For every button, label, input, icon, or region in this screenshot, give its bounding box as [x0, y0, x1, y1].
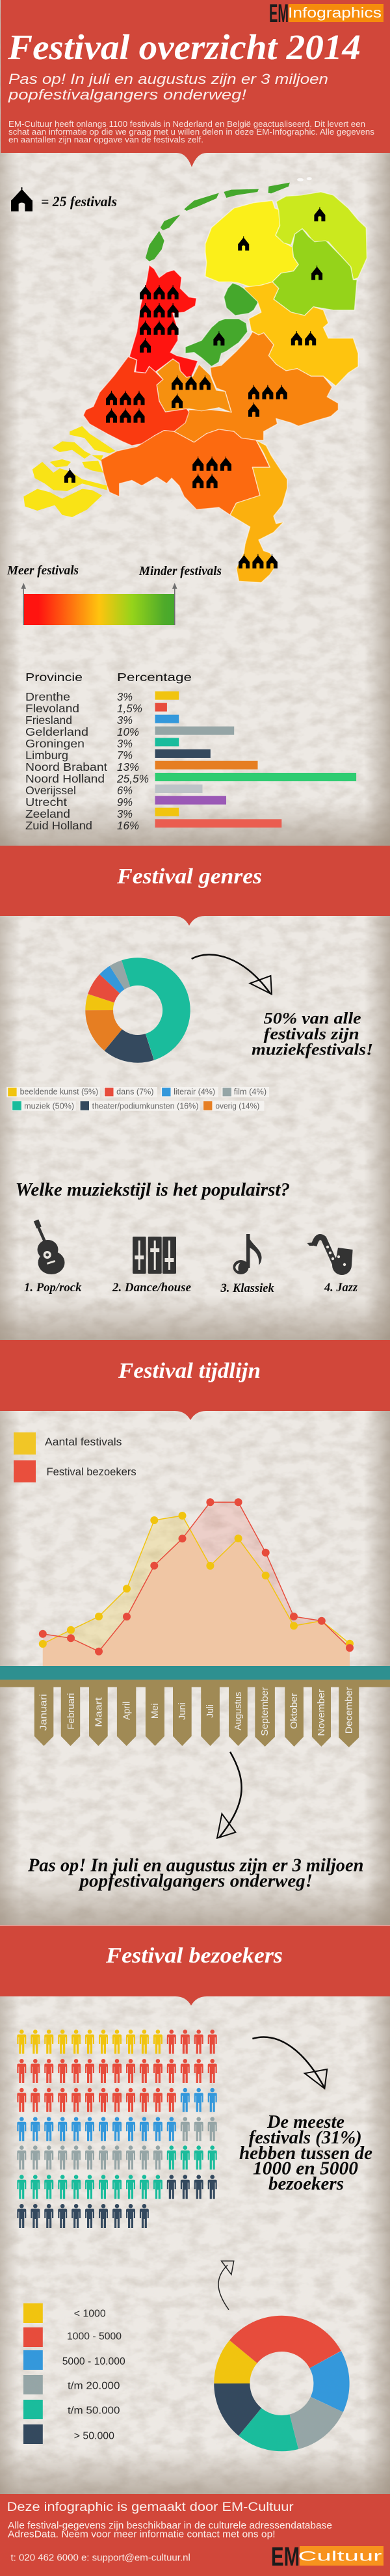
month labels: Juni	[177, 1702, 188, 1720]
area: festivals	[43, 1516, 350, 1666]
EM Infographics logo: EM	[269, 0, 289, 28]
percentages: 10%	[117, 725, 139, 738]
Flevoland	[185, 283, 259, 366]
month tabs	[34, 1687, 359, 1747]
subtitle	[8, 71, 328, 103]
subtitle: Pas op! In juli en augustus zijn er 3 miljoen	[8, 71, 328, 87]
month labels: Oktober	[289, 1693, 300, 1729]
province names: Flevoland	[25, 702, 79, 715]
visitor legend: 5000 - 10.000	[62, 2356, 125, 2367]
month labels: Juli	[205, 1704, 216, 1718]
province names: Utrecht	[25, 796, 67, 809]
label: klassiek: 3. Klassiek	[220, 1281, 274, 1295]
area overlap	[43, 1531, 350, 1666]
genre legend: beeldende kunst (5%)	[20, 1087, 98, 1097]
percentages: 9%	[117, 796, 133, 809]
province names: Gelderland	[25, 725, 88, 738]
month labels	[38, 1687, 355, 1736]
month labels: November	[316, 1689, 327, 1736]
colour scale legend: Minder festivals	[138, 564, 222, 578]
label: pop/rock: 1. Pop/rock	[24, 1281, 82, 1295]
tent legend: = 25 festivals	[41, 193, 117, 209]
colour scale legend: Meer festivals	[6, 563, 79, 578]
visitor legend: t/m 20.000	[68, 2381, 120, 2392]
intro text	[8, 120, 374, 144]
percentages: 3%	[117, 737, 133, 750]
row 2	[17, 2059, 217, 2083]
Noord Holland	[129, 265, 198, 377]
bar chart	[155, 691, 356, 827]
genre legend	[6, 1087, 269, 1111]
percentages: 16%	[117, 819, 139, 832]
callout: 50% music festivals	[252, 1010, 373, 1059]
row 6	[17, 2175, 217, 2199]
banner: Festival tijdlijn	[0, 1340, 390, 1420]
arrow down to callout	[217, 1752, 242, 1838]
intro text: en aantallen zijn naar opgave van de festivals zelf.	[8, 135, 203, 144]
area: visitors	[43, 1502, 350, 1666]
callout: 50% music festivals: muziekfestivals!	[252, 1041, 373, 1059]
visitor legend	[23, 2303, 125, 2444]
EM Cultuur logo	[271, 2542, 384, 2571]
callout: 3 million visitors: popfestivalgangers onderweg!	[78, 1872, 313, 1892]
table heading: Provincie	[25, 671, 83, 684]
banner: Festival bezoekers	[0, 1925, 390, 2006]
Zuid Holland	[83, 356, 189, 446]
Limburg	[230, 440, 287, 583]
map of the Netherlands	[23, 177, 367, 583]
province names: Friesland	[25, 714, 72, 727]
Noord Brabant	[101, 429, 270, 515]
EM Infographics logo	[269, 0, 384, 28]
banner: Festival genres: Festival genres	[116, 865, 262, 889]
Zeeland	[23, 426, 116, 517]
callout: most festivals: 1000 en 5000	[253, 2159, 358, 2179]
callout: 3 million visitors	[27, 1856, 364, 1892]
Wadden islands	[146, 183, 290, 262]
label: dance/house: 2. Dance/house	[112, 1281, 192, 1295]
tent legend	[11, 187, 117, 211]
subtitle: popfestivalgangers onderweg!	[8, 87, 246, 103]
percentages: 25,5%	[116, 772, 149, 785]
arrow up to pictogram	[218, 2261, 234, 2310]
Overijssel	[244, 282, 358, 386]
donut chart: genres	[83, 956, 192, 1065]
timeline legend	[14, 1432, 136, 1483]
timeline axis	[0, 1666, 390, 1747]
EM Cultuur logo: Cultuur	[298, 2549, 382, 2564]
genre legend: film (4%)	[234, 1087, 266, 1097]
province names	[25, 690, 107, 832]
intro text: EM-Cultuur heeft onlangs 1100 festivals in Nederland en België geactualiseerd. Dit levert een	[8, 120, 365, 129]
arrow to visitors callout	[252, 2037, 327, 2089]
banner: Festival genres	[0, 846, 390, 926]
donut chart: visitors	[212, 2313, 352, 2454]
province names: Zeeland	[25, 807, 70, 820]
visitor legend: t/m 50.000	[68, 2406, 120, 2417]
province names: Noord Holland	[25, 772, 105, 785]
row 1	[17, 2030, 217, 2054]
month labels: September	[259, 1687, 270, 1736]
visitor legend: < 1000	[74, 2309, 106, 2320]
heading: most popular music style: Welke muziekstijl is het populairst?	[16, 1179, 290, 1200]
callout: most festivals: hebben tussen de	[239, 2143, 372, 2164]
dots: visitors	[39, 1498, 354, 1656]
row 3	[17, 2088, 217, 2112]
month labels: December	[343, 1687, 355, 1734]
intro text: schat aan informatie op die we graag met u willen delen in deze EM-Infographic. Alle gegevens	[8, 127, 374, 137]
province names: Groningen	[25, 737, 84, 750]
label: jazz: 4. Jazz	[324, 1281, 358, 1295]
province names: Limburg	[25, 749, 68, 762]
percentages: 3%	[117, 714, 133, 727]
row 4	[17, 2117, 217, 2141]
title: Festival overzicht 2014	[7, 27, 361, 67]
row 5	[17, 2145, 217, 2169]
callout: 50% music festivals: 50% van alle	[264, 1010, 361, 1027]
province names: Zuid Holland	[25, 819, 92, 832]
visitor legend: > 50.000	[74, 2430, 114, 2441]
percentages: 3%	[117, 807, 133, 820]
icon: guitar	[36, 1220, 65, 1274]
icon: saxophone	[307, 1237, 353, 1275]
month labels: Maart	[94, 1697, 104, 1727]
callout: most festivals: bezoekers	[268, 2174, 344, 2194]
callout: most festivals: festivals (31%)	[249, 2128, 362, 2148]
banner: Festival tijdlijn: Festival tijdlijn	[118, 1359, 261, 1383]
percentages: 6%	[117, 784, 133, 797]
area chart	[39, 1498, 354, 1666]
month labels: Januari	[38, 1694, 49, 1731]
contact details: t: 020 462 6000 e: support@em-cultuur.nl	[10, 2553, 190, 2564]
visitor legend: 1000 - 5000	[67, 2331, 122, 2342]
callout: 3 million visitors: Pas op! In juli en augustus zijn er 3 miljoen	[27, 1856, 364, 1876]
icon: mixer	[133, 1237, 176, 1274]
footer text	[8, 2521, 332, 2540]
genre legend: literair (4%)	[174, 1087, 215, 1097]
EM Cultuur logo: EM	[271, 2542, 300, 2571]
genre legend: muziek (50%)	[24, 1101, 74, 1111]
genre legend: theater/podiumkunsten (16%)	[92, 1101, 198, 1111]
footer panel	[0, 2494, 390, 2576]
footer heading: Deze infographic is gemaakt door EM-Cultuur	[7, 2500, 294, 2514]
percentages	[116, 690, 149, 832]
line: festivals	[43, 1516, 350, 1644]
province names: Noord Brabant	[25, 760, 107, 773]
month labels: Augustus	[233, 1692, 244, 1730]
footer text: Alle festival-gegevens zijn beschikbaar in de culturele adressendatabase	[8, 2521, 332, 2531]
percentages: 13%	[117, 760, 139, 773]
genre legend: dans (7%)	[116, 1087, 153, 1097]
timeline legend: Festival bezoekers	[47, 1466, 136, 1478]
province names: Overijssel	[25, 784, 76, 797]
month labels: Februari	[66, 1693, 77, 1730]
Groningen	[276, 192, 367, 280]
banner: Festival bezoekers: Festival bezoekers	[105, 1944, 283, 1968]
pictogram of people	[17, 2030, 217, 2228]
Drenthe	[272, 229, 357, 315]
footer text: AdresData. Neem voor meer informatie contact met ons op!	[8, 2530, 276, 2540]
Gelderland	[174, 332, 338, 442]
colour scale legend	[6, 563, 222, 625]
icon: music note	[233, 1232, 262, 1274]
table heading: Percentage	[117, 671, 192, 684]
EM Infographics logo: Infographics	[288, 5, 382, 21]
dots: festivals	[39, 1512, 354, 1648]
header panel	[1, 0, 390, 167]
province names: Drenthe	[25, 690, 70, 703]
callout: most festivals	[239, 2112, 372, 2194]
row 7	[17, 2204, 149, 2228]
line: visitors	[43, 1502, 350, 1652]
header red banner	[1, 0, 390, 167]
callout: 50% music festivals: festivals zijn	[264, 1025, 359, 1043]
icon: tent	[11, 187, 32, 211]
callout: most festivals: De meeste	[266, 2112, 344, 2132]
month labels: Mei	[150, 1703, 161, 1719]
percentages: 7%	[117, 749, 133, 762]
province percentage table	[25, 671, 356, 832]
month labels: April	[121, 1702, 133, 1720]
table heading	[25, 671, 192, 684]
percentages: 1,5%	[117, 702, 142, 715]
Utrecht	[157, 359, 231, 412]
tents on the map	[64, 207, 325, 569]
percentages: 3%	[117, 690, 133, 703]
Friesland	[205, 200, 298, 288]
genre legend: overig (14%)	[215, 1101, 259, 1111]
timeline legend: Aantal festivals	[45, 1436, 122, 1448]
arrow to genres callout	[192, 955, 272, 994]
